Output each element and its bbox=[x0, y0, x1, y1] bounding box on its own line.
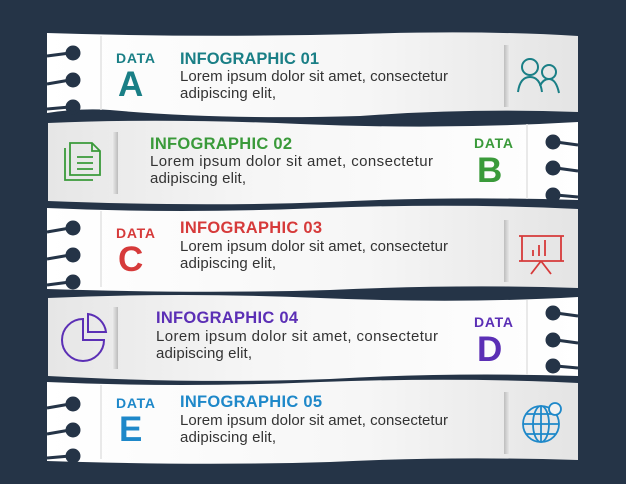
text E bbox=[180, 393, 448, 446]
label D: DATA bbox=[474, 314, 513, 330]
perforations B bbox=[547, 136, 578, 201]
label A bbox=[116, 50, 155, 104]
label E bbox=[116, 395, 155, 449]
strip B bbox=[48, 121, 578, 204]
perforations C bbox=[47, 222, 79, 288]
text B: INFOGRAPHIC 02 bbox=[150, 135, 292, 153]
icon panel: pie chart bbox=[62, 307, 118, 369]
strip E bbox=[47, 380, 578, 464]
icon panel: people bbox=[504, 45, 559, 107]
icon panel: globe bbox=[504, 392, 561, 454]
text D: INFOGRAPHIC 04 bbox=[156, 309, 299, 327]
text A: Lorem ipsum dolor sit amet, consectetur bbox=[180, 68, 448, 85]
text D: adipiscing elit, bbox=[156, 345, 252, 362]
perforations E bbox=[47, 398, 79, 462]
label C: C bbox=[118, 240, 143, 279]
label E: DATA bbox=[116, 395, 155, 411]
label C bbox=[116, 225, 155, 279]
text A: adipiscing elit, bbox=[180, 85, 276, 102]
label C: DATA bbox=[116, 225, 155, 241]
label B: DATA bbox=[474, 135, 513, 151]
text A bbox=[180, 50, 448, 102]
perforations A bbox=[47, 47, 79, 113]
icon panel: presentation bbox=[504, 220, 564, 282]
text C bbox=[180, 219, 448, 272]
text B: Lorem ipsum dolor sit amet, consectetur bbox=[150, 153, 433, 170]
icon panel: document bbox=[65, 132, 118, 194]
label B: B bbox=[477, 151, 502, 190]
text C: INFOGRAPHIC 03 bbox=[180, 219, 322, 237]
text B bbox=[150, 135, 433, 187]
text E: INFOGRAPHIC 05 bbox=[180, 393, 322, 411]
text E: adipiscing elit, bbox=[180, 429, 276, 446]
text C: Lorem ipsum dolor sit amet, consectetur bbox=[180, 238, 448, 255]
strip C bbox=[47, 206, 578, 292]
label E: E bbox=[119, 410, 142, 449]
label B bbox=[474, 135, 513, 190]
text A: INFOGRAPHIC 01 bbox=[180, 50, 319, 68]
text B: adipiscing elit, bbox=[150, 170, 246, 187]
text D: Lorem ipsum dolor sit amet, consectetur bbox=[156, 328, 438, 345]
perforations D bbox=[547, 307, 578, 372]
label A: A bbox=[118, 65, 143, 104]
label A: DATA bbox=[116, 50, 155, 66]
text D bbox=[156, 309, 438, 362]
text C: adipiscing elit, bbox=[180, 255, 276, 272]
label D bbox=[474, 314, 513, 369]
label D: D bbox=[477, 330, 502, 369]
text E: Lorem ipsum dolor sit amet, consectetur bbox=[180, 412, 448, 429]
strip D bbox=[48, 295, 578, 381]
strip A bbox=[47, 32, 578, 117]
